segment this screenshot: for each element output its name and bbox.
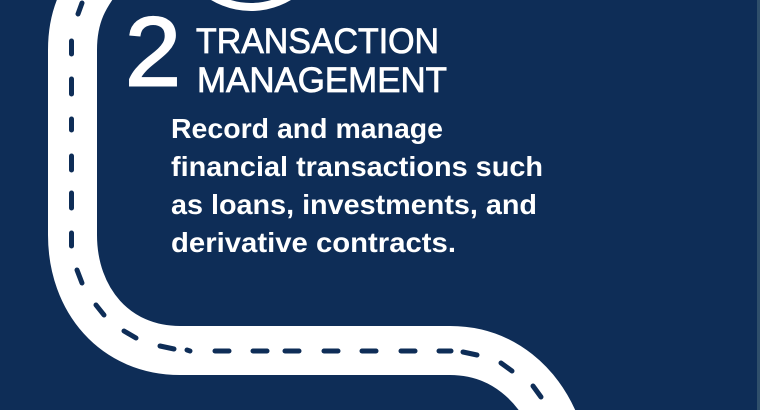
road centre dashes: [72, 3, 541, 397]
heading: [196, 22, 447, 100]
icon: circle ring cropped at top: [177, 0, 325, 7]
body text: Record and manage: [171, 113, 443, 144]
road: [72, 0, 557, 410]
heading: MANAGEMENT: [197, 61, 447, 100]
body text: derivative contracts.: [171, 227, 456, 258]
body text: financial transactions such: [171, 151, 543, 182]
body text: as loans, investments, and: [171, 189, 537, 220]
heading: TRANSACTION: [196, 22, 439, 61]
body text: [171, 113, 543, 258]
